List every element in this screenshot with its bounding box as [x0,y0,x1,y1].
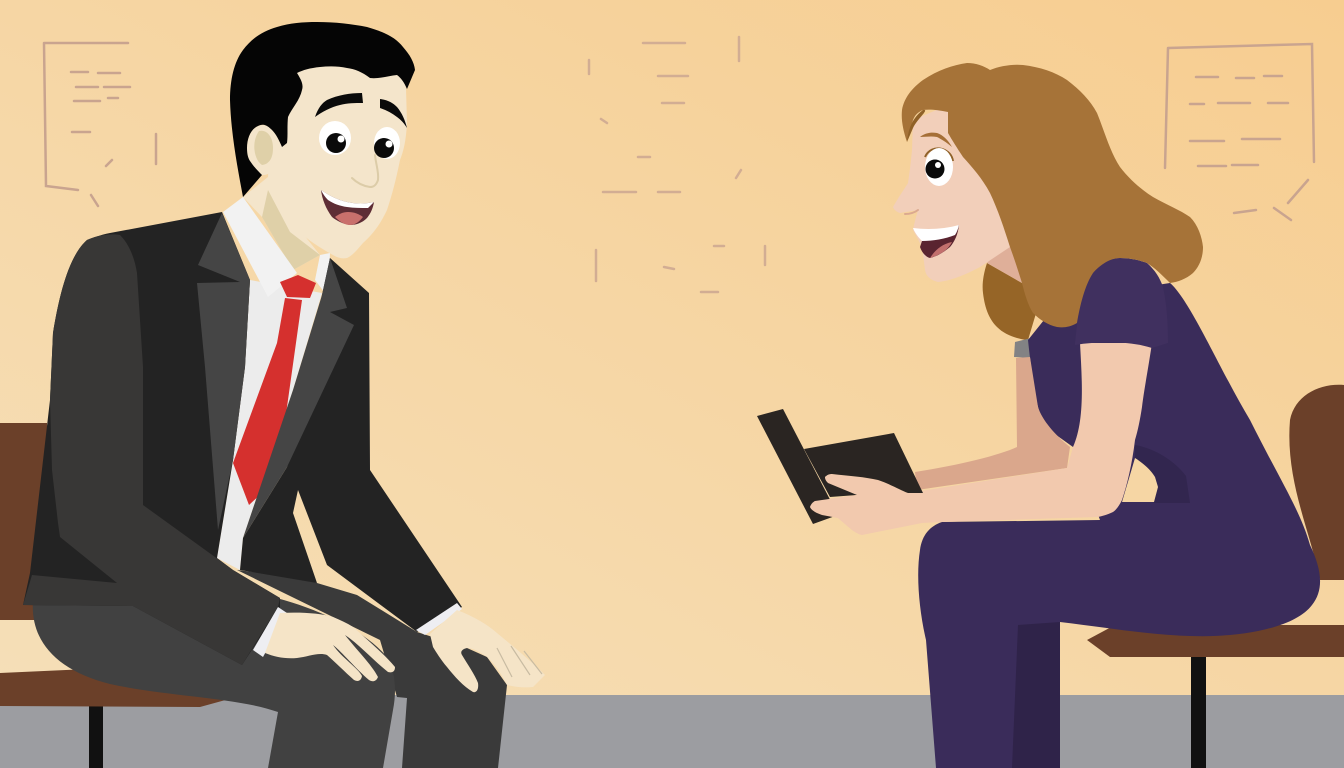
jacket right side [240,258,462,632]
floor [0,695,1344,768]
nose [352,155,378,187]
eyes [319,121,400,159]
fingers over book [810,495,880,535]
collar right [315,253,330,297]
hair shadow at temple [907,110,925,142]
hair [230,22,415,197]
neck [987,238,1022,283]
far arm [915,357,1070,490]
far trouser leg [237,570,507,768]
face [893,105,1010,282]
eye [925,148,953,186]
eyebrow [920,133,952,147]
left lapel [197,213,250,530]
shirt cuff left [253,607,287,657]
dress shaded fold [1135,445,1190,503]
jacket sleeve [23,234,280,665]
wall sketch: right note [1165,44,1314,220]
near arm and hand [810,343,1152,535]
mouth [321,190,374,225]
dress leg shading [1012,622,1060,768]
hair [902,63,1203,327]
book [757,409,923,524]
sleeve [1075,258,1168,348]
wall sketch: centre notes [589,37,765,292]
neck [243,177,320,270]
hand right [430,610,545,692]
chair: woman [1087,385,1344,768]
woman [757,63,1320,768]
wall sketch: left note [44,43,156,206]
chair: man [0,423,240,768]
collar left [223,197,297,297]
head [268,55,407,258]
gap behind arm [1122,458,1158,502]
ear [247,125,276,175]
dress [918,283,1320,768]
nose shadow [905,210,918,214]
shirt [217,280,322,570]
jacket left side [23,212,280,665]
mouth [913,225,959,258]
man [23,22,545,768]
right lapel [243,258,354,538]
hand left [265,613,395,681]
shirt cuff right [416,603,462,635]
grey undergarment [1014,338,1031,358]
back hair [983,263,1040,340]
near trouser leg [33,590,395,768]
eyebrows [315,93,407,128]
tie [233,275,316,505]
